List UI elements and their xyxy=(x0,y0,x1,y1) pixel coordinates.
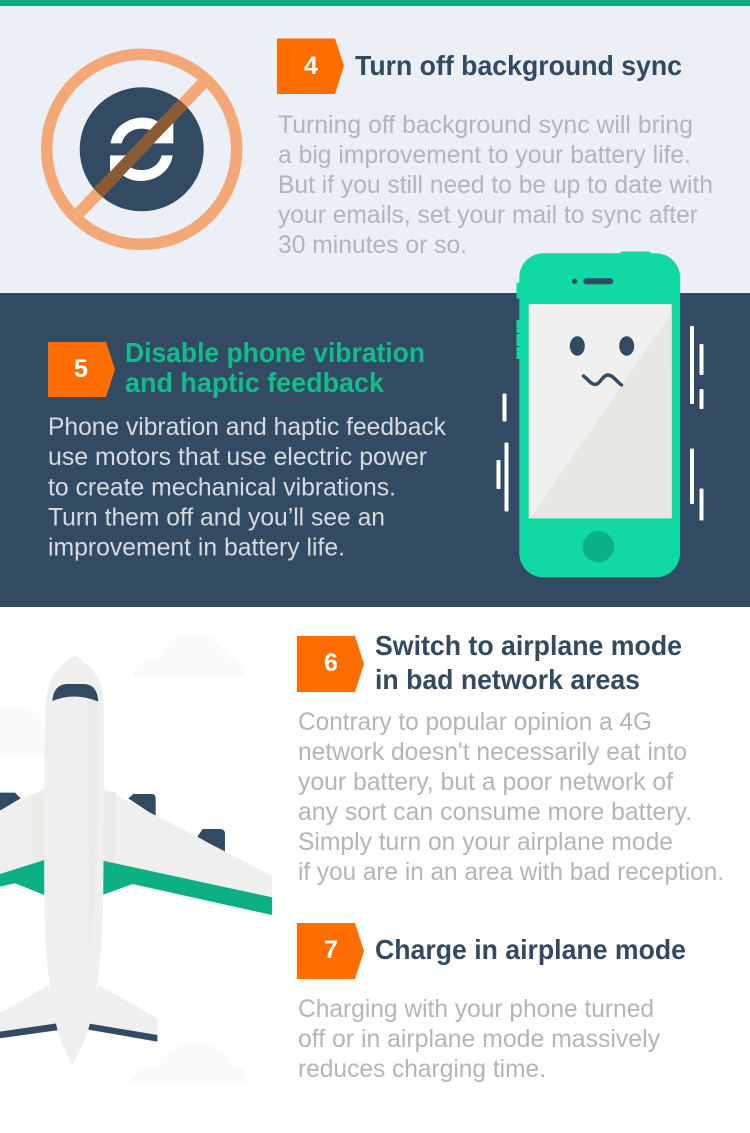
engines xyxy=(0,793,225,853)
text block: charging: reduces charging time. xyxy=(298,1055,546,1083)
heading: turn off background sync: Turn off background sync xyxy=(355,50,682,81)
text block: background sync: a big improvement to your battery life. xyxy=(278,141,691,169)
text block: airplane mode: Simply turn on your airplane mode xyxy=(298,828,673,856)
home button xyxy=(583,531,614,562)
text block: background sync xyxy=(278,111,713,259)
heading: switch to airplane mode: in bad network areas xyxy=(375,664,640,695)
tag: number 4 xyxy=(277,38,344,94)
heading: disable phone vibration: Disable phone vibration xyxy=(125,337,425,368)
text block: background sync: your emails, set your mail to sync after xyxy=(278,201,698,229)
text block: phone vibration: to create mechanical vibrations. xyxy=(48,474,396,502)
tag: number 6 xyxy=(297,636,364,692)
text block: airplane mode xyxy=(298,708,724,886)
text block: phone vibration: improvement in battery life. xyxy=(48,534,345,562)
text block: airplane mode: your battery, but a poor network of xyxy=(298,768,673,796)
top green stripe xyxy=(0,0,750,6)
heading: switch to airplane mode: Switch to airplane mode xyxy=(375,630,682,661)
text block: phone vibration: Phone vibration and haptic feedback xyxy=(48,413,446,441)
text block: background sync: 30 minutes or so. xyxy=(278,231,467,259)
wings xyxy=(0,788,272,915)
worried face xyxy=(570,336,634,385)
tag: number 7 xyxy=(297,923,364,979)
tag: number 4: 4 xyxy=(304,52,318,80)
icon: vibrating phone xyxy=(496,252,704,577)
tag: number 5: 5 xyxy=(74,355,88,383)
cockpit window xyxy=(52,684,98,702)
heading: switch to airplane mode xyxy=(375,630,682,695)
phone screen xyxy=(529,304,672,518)
heading: disable phone vibration xyxy=(125,337,425,398)
icon: crossed-out sync xyxy=(47,54,237,244)
speaker xyxy=(572,278,613,284)
tag: number 7: 7 xyxy=(324,936,338,964)
text block: background sync: But if you still need to be up to date with xyxy=(278,171,713,199)
heading: disable phone vibration: and haptic feedback xyxy=(125,367,384,398)
text block: charging xyxy=(298,995,660,1083)
fuselage xyxy=(44,656,104,1064)
panel: disable phone vibration xyxy=(0,293,750,607)
text block: airplane mode: if you are in an area with bad reception. xyxy=(298,858,724,886)
text block: airplane mode: network doesn't necessarily eat into xyxy=(298,738,687,766)
phone body xyxy=(519,253,680,577)
tag: number 5 xyxy=(48,342,115,397)
text block: phone vibration: use motors that use electric power xyxy=(48,443,427,471)
vibration lines xyxy=(496,326,704,520)
illustration: airplane and clouds xyxy=(0,633,272,1083)
text block: phone vibration xyxy=(48,413,446,562)
text block: airplane mode: any sort can consume more battery. xyxy=(298,798,692,826)
clouds xyxy=(0,633,248,1083)
heading: charge in airplane mode: Charge in airplane mode xyxy=(375,934,686,965)
panel: turn off background sync xyxy=(0,6,750,293)
tag: number 6: 6 xyxy=(324,649,338,677)
phone side buttons xyxy=(516,252,650,359)
text block: background sync: Turning off background sync will bring xyxy=(278,111,693,139)
text block: charging: Charging with your phone turned xyxy=(298,995,654,1023)
text block: phone vibration: Turn them off and you’ll see an xyxy=(48,504,385,532)
text block: airplane mode: Contrary to popular opinion a 4G xyxy=(298,708,652,736)
text block: charging: off or in airplane mode massively xyxy=(298,1025,660,1053)
tailplane xyxy=(0,985,157,1042)
